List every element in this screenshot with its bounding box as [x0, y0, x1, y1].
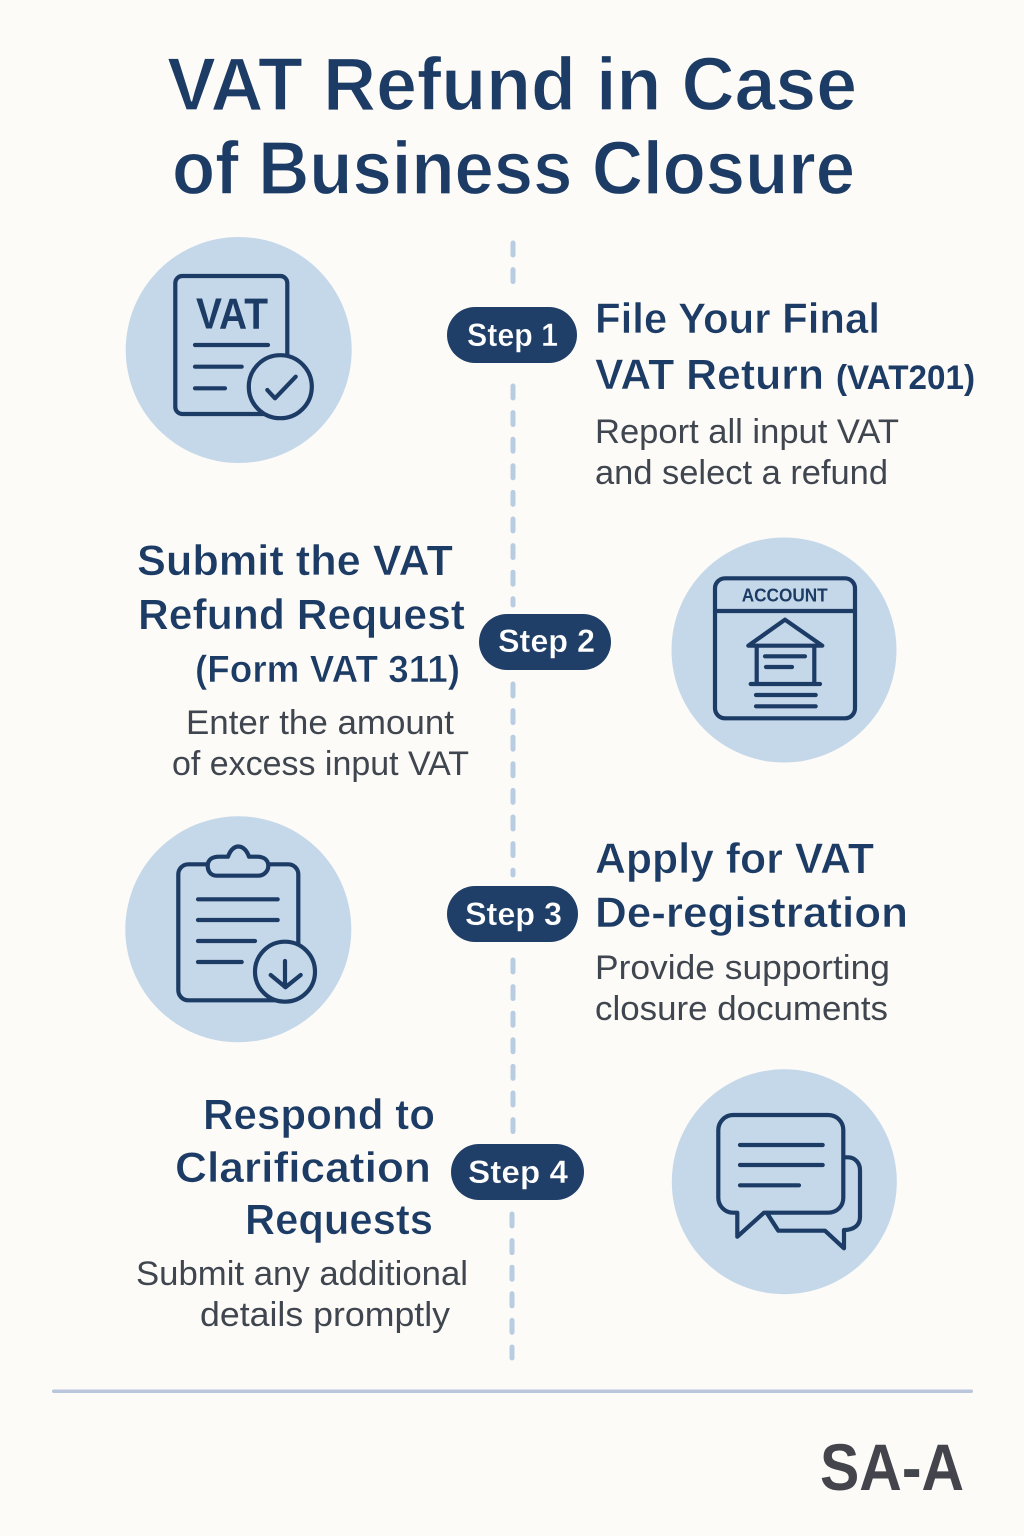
step 3 text: Provide supporting: [595, 949, 890, 987]
step 1 badge: Step 1: [467, 317, 558, 353]
step 4 badge: [451, 1144, 584, 1200]
step 4 text: Submit any additional: [136, 1255, 468, 1293]
step 3 badge: [447, 886, 578, 942]
icon: clipboard with download: [125, 816, 351, 1042]
dashed timeline: [512, 243, 513, 1358]
title: [167, 42, 857, 210]
step 1 text: (VAT201): [836, 359, 975, 397]
step 2 text: Submit the VAT: [137, 537, 453, 585]
step 3 text: closure documents: [595, 990, 888, 1028]
step 2 badge: Step 2: [498, 623, 595, 659]
step 2 text: (Form VAT 311): [195, 649, 460, 691]
step 1 text: Report all input VAT: [595, 413, 899, 451]
step 4 text: Clarification: [175, 1144, 431, 1192]
icon: account bank page: [672, 538, 896, 762]
step 3 badge: Step 3: [465, 896, 562, 932]
icon: account bank page: ACCOUNT: [742, 586, 828, 606]
step 4 text: details promptly: [200, 1296, 451, 1334]
step 1 text: VAT Return: [595, 351, 824, 399]
step 3 text: Apply for VAT: [595, 835, 874, 883]
step 1 badge: [447, 307, 577, 363]
icon: VAT document with check: VAT: [196, 289, 268, 338]
title: of Business Closure: [172, 126, 855, 210]
title: VAT Refund in Case: [167, 42, 857, 126]
step 1 text: [595, 295, 975, 492]
step 2 text: [137, 537, 469, 783]
step 4 badge: Step 4: [468, 1154, 568, 1190]
step 1 text: File Your Final: [595, 295, 880, 343]
icon: speech bubbles: [672, 1069, 897, 1294]
step 4 text: Respond to: [203, 1091, 435, 1139]
step 3 text: De-registration: [595, 889, 908, 937]
step 1 text: and select a refund: [595, 454, 888, 492]
step 3 text: [595, 835, 908, 1028]
step 2 text: Refund Request: [138, 591, 465, 639]
step 2 text: Enter the amount: [186, 704, 454, 742]
step 2 text: of excess input VAT: [172, 745, 469, 783]
icon: VAT document with check: [126, 237, 352, 463]
logo: SA-A: SA-A: [820, 1430, 964, 1504]
step 4 text: Requests: [245, 1196, 433, 1244]
step 2 badge: [479, 614, 611, 670]
footer rule: [52, 1390, 973, 1393]
step 4 text: [136, 1091, 468, 1334]
